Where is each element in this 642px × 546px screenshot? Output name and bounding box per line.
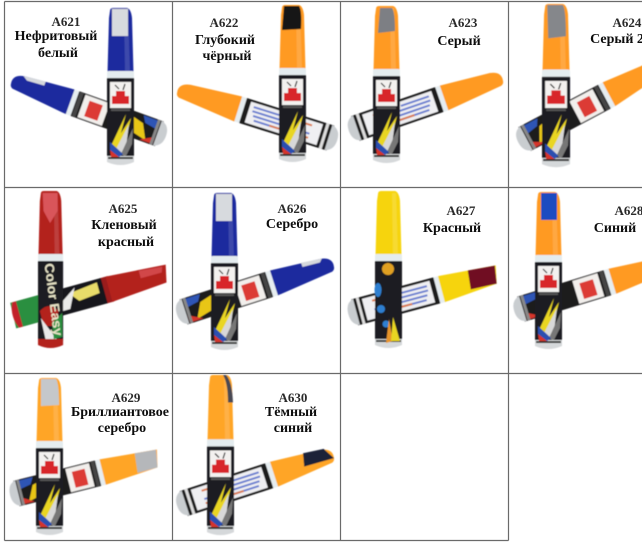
pen pair: A626 blue with silver tip bbox=[173, 193, 337, 350]
caption A622: A622 bbox=[210, 15, 238, 30]
caption A624: A624 bbox=[613, 15, 642, 30]
caption A629: серебро bbox=[98, 421, 146, 436]
pen pair: A629 orange with brilliant silver tip bbox=[7, 378, 162, 535]
pen brand text: Color Easy bbox=[42, 262, 65, 337]
caption A630: A630 bbox=[279, 390, 307, 405]
caption A628: Синий bbox=[594, 221, 636, 236]
caption A630 bbox=[265, 390, 317, 436]
pen pair: A628 orange with blue tip bbox=[510, 192, 642, 349]
caption A626: A626 bbox=[278, 201, 307, 216]
pen pair: A621 blue bbox=[7, 8, 170, 165]
caption A621: Нефритовый bbox=[15, 29, 97, 44]
caption A627 bbox=[423, 203, 481, 236]
captions bbox=[15, 14, 642, 436]
caption A630: Тёмный bbox=[265, 405, 317, 420]
pen pair: A624 orange with grey 2 tip bbox=[512, 4, 642, 167]
caption A625: красный bbox=[98, 235, 154, 250]
caption A627: Красный bbox=[423, 221, 481, 236]
caption A621 bbox=[15, 14, 97, 61]
caption A625: A625 bbox=[109, 201, 138, 216]
caption A630: синий bbox=[274, 421, 312, 436]
caption A624 bbox=[590, 15, 642, 47]
caption A627: A627 bbox=[447, 203, 476, 218]
caption A622: Глубокий bbox=[195, 33, 255, 48]
caption A622 bbox=[195, 15, 255, 64]
caption A625: Кленовый bbox=[91, 218, 157, 233]
caption A629: Бриллиантовое bbox=[71, 405, 169, 420]
caption A623: Серый bbox=[437, 34, 481, 49]
caption A623: A623 bbox=[449, 15, 478, 30]
caption A629 bbox=[71, 390, 169, 436]
caption A623 bbox=[437, 15, 481, 49]
pen pair: A623 orange with grey tip bbox=[345, 6, 507, 163]
caption A621: белый bbox=[38, 46, 78, 61]
caption A626: Серебро bbox=[266, 217, 318, 232]
pen pair: A630 orange with dark blue tip bbox=[173, 375, 337, 535]
caption A622: чёрный bbox=[203, 49, 251, 64]
caption A621: A621 bbox=[52, 14, 80, 29]
caption A629: A629 bbox=[112, 390, 141, 405]
pen pair: A625 maple red bbox=[9, 191, 171, 348]
pen pair: A627 yellow with red tip bbox=[345, 191, 501, 348]
caption A625 bbox=[91, 201, 157, 250]
caption A626 bbox=[266, 201, 318, 232]
caption A628 bbox=[594, 203, 642, 236]
pen pair: A622 orange with black tip bbox=[174, 5, 341, 162]
